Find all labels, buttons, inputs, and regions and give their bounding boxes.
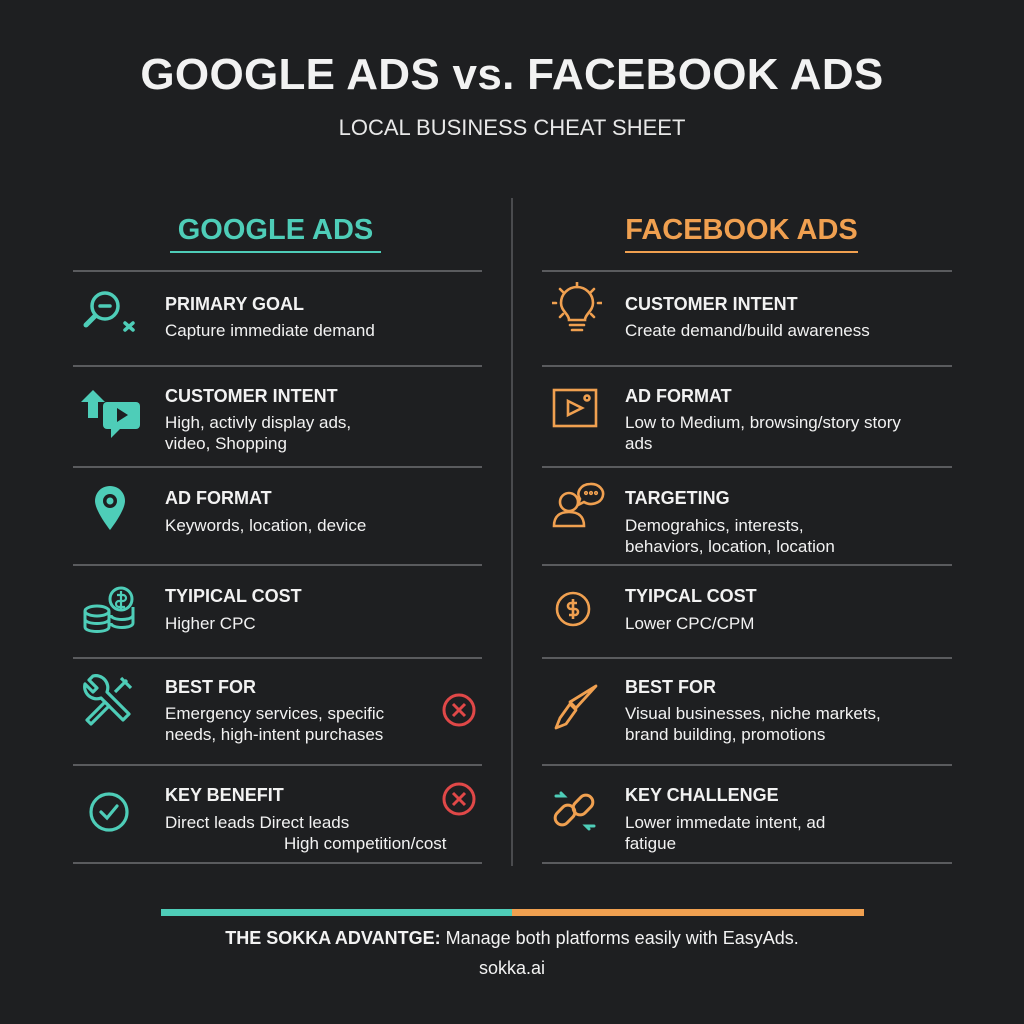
text: ad format: AD FORMAT <box>625 386 732 406</box>
panel: google ads rows: video, Shopping <box>165 434 287 453</box>
icon: arrow video <box>81 390 140 438</box>
panel: google ads rows: needs, high-intent purchases <box>165 725 383 744</box>
panel: google ads rows: Higher CPC <box>165 614 256 633</box>
text: best for: BEST FOR <box>625 677 716 697</box>
icon: lightbulb <box>552 282 602 332</box>
icon: person chat <box>552 482 604 528</box>
title: GOOGLE ADS vs. FACEBOOK ADS <box>140 50 884 99</box>
text: typical cost: TYIPCAL COST <box>625 586 757 606</box>
panel: google ads rows: High competition/cost <box>284 834 447 853</box>
footer url: sokka.ai <box>479 958 545 978</box>
panel: facebook ads rows: Visual businesses, niche markets, <box>625 704 881 723</box>
panel: facebook ads rows: brand building, promotions <box>625 725 825 744</box>
text: best for: BEST FOR <box>165 677 256 697</box>
text: typical cost: TYIPICAL COST <box>165 586 302 606</box>
icon: brush <box>554 684 598 730</box>
text: key challenge: KEY CHALLENGE <box>625 785 779 805</box>
panel: facebook ads rows: Demograhics, interests, <box>625 516 804 535</box>
panel: facebook ads rows: Create demand/build awareness <box>625 321 870 340</box>
panel: facebook ads rows: Lower immedate intent, ad <box>625 813 825 832</box>
panel: google ads rows: Direct leads Direct leads <box>165 813 349 832</box>
icon: video frame <box>552 388 598 428</box>
icon: dollar coin <box>556 592 590 626</box>
icon: location pin <box>95 486 125 530</box>
heading: facebook ads: FACEBOOK ADS <box>625 214 858 246</box>
heading: google ads: GOOGLE ADS <box>178 214 373 246</box>
panel: google ads rows: Emergency services, specific <box>165 704 384 723</box>
footer bar <box>161 909 864 916</box>
icon: check <box>89 792 129 832</box>
text: primary goal: PRIMARY GOAL <box>165 294 304 314</box>
icon: red x 2 <box>442 782 476 816</box>
icon: coins <box>84 586 134 633</box>
text: customer intent: CUSTOMER INTENT <box>625 294 798 314</box>
panel: facebook ads rows: Low to Medium, browsing/story story <box>625 413 901 432</box>
subtitle: LOCAL BUSINESS CHEAT SHEET <box>339 115 685 140</box>
text: targeting: TARGETING <box>625 488 730 508</box>
icon: tools <box>83 674 132 726</box>
panel: facebook ads rows: Lower CPC/CPM <box>625 614 754 633</box>
vertical divider <box>511 198 513 866</box>
text: key benefit: KEY BENEFIT <box>165 785 284 805</box>
panel: facebook ads rows <box>552 282 901 853</box>
panel: google ads rows: Capture immediate demand <box>165 321 375 340</box>
text: ad format: AD FORMAT <box>165 488 272 508</box>
panel: google ads rows <box>81 291 476 853</box>
panel: facebook ads rows: behaviors, location, location <box>625 537 835 556</box>
panel: google ads rows: High, activly display ads, <box>165 413 351 432</box>
icon: broken link <box>554 791 596 831</box>
panel: facebook ads rows: ads <box>625 434 652 453</box>
icon: magnifier <box>84 291 135 332</box>
icon: red x 1 <box>442 694 476 726</box>
panel: google ads rows: Keywords, location, device <box>165 516 366 535</box>
text: customer intent: CUSTOMER INTENT <box>165 386 338 406</box>
panel: facebook ads rows: fatigue <box>625 834 676 853</box>
footer text: THE SOKKA ADVANTGE: Manage both platforms easily with EasyAds. <box>225 928 799 948</box>
